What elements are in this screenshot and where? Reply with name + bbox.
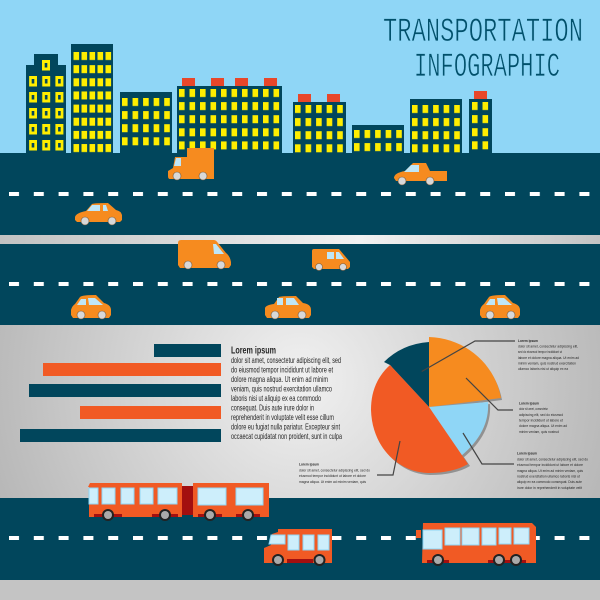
car 1 <box>75 203 122 225</box>
slice: red orange <box>371 365 468 473</box>
callout 2: minim veniam, quis nostrud <box>519 429 559 434</box>
main text block: dolor sit amet, consectetur adipiscing elit, sed <box>231 355 341 365</box>
pie chart <box>371 337 502 475</box>
building 4 <box>177 78 282 153</box>
infographic panel background <box>0 325 600 498</box>
callout 3 <box>517 450 589 490</box>
callout 1: labore et dolore magna aliqua. Ut enim ad <box>518 355 579 360</box>
callout 3: aliquip ex ea commodo consequat. Duis aute <box>517 479 583 484</box>
car 3 <box>265 296 311 319</box>
road 1 <box>0 153 600 235</box>
callout 2: dolor sit amet, consectetur <box>519 406 548 411</box>
small bus <box>264 529 332 566</box>
callout 3: irure dolor in reprehenderit in voluptate velit <box>517 485 583 490</box>
city skyline <box>26 44 492 153</box>
building 3 <box>120 92 172 153</box>
large bus <box>416 523 536 566</box>
slice shadows <box>373 339 502 475</box>
pickup <box>394 163 447 185</box>
callout 3: nostrud exercitation ullamco laboris nisi ut <box>517 473 581 478</box>
callout 2 <box>519 400 567 434</box>
main text block <box>231 344 342 441</box>
callout 1: sed do eiusmod tempor incididunt ut <box>518 349 563 354</box>
callout 1 <box>518 338 579 371</box>
car 4 <box>480 295 520 319</box>
main text block: consequat. Duis aute irure dolor in <box>231 403 314 413</box>
van 2 <box>312 249 350 270</box>
bar chart <box>20 344 221 442</box>
bottom gray band <box>0 580 600 600</box>
callout 2: Lorem ipsum <box>519 400 539 406</box>
slice: orange <box>429 337 501 407</box>
leader lines <box>377 341 515 475</box>
truck <box>168 148 214 180</box>
title <box>383 14 583 87</box>
callout 3: eiusmod tempor incididunt ut labore et dolore <box>517 462 584 467</box>
building 1 <box>26 54 66 153</box>
road 3 <box>0 498 600 580</box>
callout 4 <box>299 462 371 484</box>
callout 1: minim veniam, quis nostrud exercitation <box>518 360 576 366</box>
sky background <box>0 0 600 153</box>
main text block: dolore magna aliqua. Ut enim ad minim <box>231 374 328 384</box>
callout 3: magna aliqua. Ut enim ad minim veniam, quis <box>517 468 583 473</box>
callout 1: ullamco laboris nisi ut aliquip ex ea <box>518 366 569 371</box>
building 2 <box>71 44 113 153</box>
main text block: laboris nisi ut aliquip ex ea commodo <box>231 393 321 403</box>
building 8 <box>469 91 492 153</box>
road 2 <box>0 244 600 325</box>
building 7 <box>410 99 462 153</box>
main text block: veniam, quis nostrud exercitation ullamco <box>231 384 332 394</box>
callout 2: dolore magna aliqua. Ut enim ad <box>519 423 567 428</box>
callout 4: Lorem ipsum <box>299 462 319 466</box>
callout 2: tempor incididunt ut labore et <box>519 417 564 422</box>
callout 4: eiusmod tempor incididunt ut labore et dolore <box>299 473 367 478</box>
callout 4: magna aliqua. Ut enim ad minim veniam, quis <box>299 479 366 484</box>
articulated bus <box>88 483 269 521</box>
van 1 <box>178 240 231 269</box>
callout 2: adipiscing elit, sed do eiusmod <box>519 412 563 417</box>
slice: light blue <box>429 402 488 456</box>
slice: dark blue <box>384 342 429 407</box>
callout 1: dolor sit amet, consectetur adipiscing elit, <box>518 344 578 348</box>
callout 3: Lorem ipsum <box>517 450 537 456</box>
main text block: Lorem ipsum <box>231 344 276 356</box>
car 2 <box>71 295 111 319</box>
main text block: reprehenderit in voluptate velit esse cillum <box>231 412 334 422</box>
building 6 <box>352 125 404 153</box>
main text block: occaecat cupidatat non proident, sunt in culpa <box>231 431 342 441</box>
building 5 <box>293 94 346 153</box>
gray divider <box>0 235 600 244</box>
callout 4: dolor sit amet, consectetur adipiscing elit, sed do <box>299 468 371 472</box>
main text block: dolore eu fugiat nulla pariatur. Excepteur sint <box>231 422 340 432</box>
callout 1: Lorem ipsum <box>518 338 538 343</box>
main text block: do eiusmod tempor incididunt ut labore et <box>231 364 333 374</box>
